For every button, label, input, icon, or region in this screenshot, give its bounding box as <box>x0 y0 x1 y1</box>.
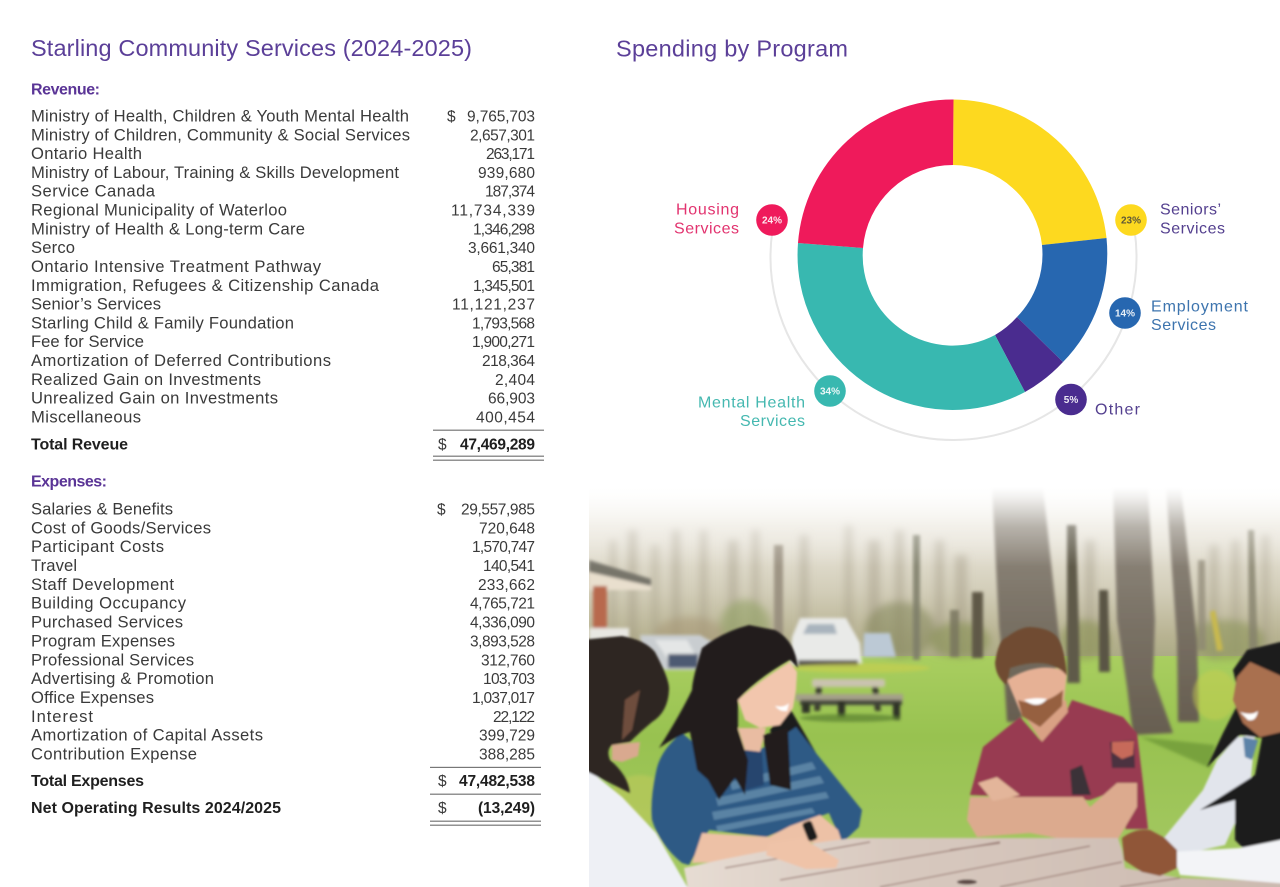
row: Starling Child and Family Foundation: 1,793,568 <box>472 315 535 332</box>
row: Immigration, Refugees and Citizenship Canada: 1,345,501 <box>473 278 535 295</box>
segment: other 5% <box>995 317 1063 392</box>
man: face and beard <box>1006 666 1068 716</box>
row: Participant Costs <box>31 537 535 556</box>
row: total revenue: Total Reveue <box>31 436 128 454</box>
row: Interest: Interest <box>31 707 93 726</box>
leader arc <box>770 230 1136 440</box>
blue car <box>863 633 896 657</box>
row: Advertising and Promotion: 103,703 <box>483 671 535 688</box>
row: Ministry of Health, Children and Youth Mental Health: 9,765,703 <box>467 108 535 126</box>
row: Participant Costs: 1,570,747 <box>472 539 535 556</box>
row: Regional Municipality of Waterloo: 11,734,339 <box>451 203 535 220</box>
row: Miscellaneous <box>31 408 535 426</box>
row: Advertising and Promotion: Advertising & Promotion <box>31 669 214 688</box>
callout: employment 14% <box>1109 297 1141 329</box>
left person: face <box>612 742 640 762</box>
row: Ontario Intensive Treatment Pathway: Ontario Intensive Treatment Pathway <box>31 257 322 276</box>
center woman: hair behind on the right <box>768 710 816 752</box>
row: Serco <box>31 238 535 257</box>
callout: housing 24% <box>756 204 788 236</box>
left person: hair <box>580 636 669 793</box>
center woman: arm and hand <box>692 815 842 869</box>
row: Travel <box>31 556 535 575</box>
row: Building Occupancy: Building Occupancy <box>31 594 187 613</box>
center woman: neck <box>738 728 766 752</box>
row: Office Expenses: 1,037,017 <box>472 690 535 707</box>
row: Purchased Services <box>31 613 535 632</box>
row: Building Occupancy <box>31 594 535 613</box>
row: Ministry of Health, Children and Youth Mental Health: $ <box>447 108 456 126</box>
label: employment services <box>1151 298 1249 334</box>
row: Starling Child and Family Foundation: Starling Child & Family Foundation <box>31 313 294 332</box>
row: Amortization of Capital Assets: Amortization of Capital Assets <box>31 726 263 745</box>
chart: spending donut <box>674 99 1249 440</box>
heading: revenue: Revenue: <box>31 82 100 98</box>
row: Office Expenses <box>31 688 535 707</box>
row: Realized Gain on Investments <box>31 370 535 389</box>
row: Service Canada: 187,374 <box>485 184 535 201</box>
right woman: forearm sleeve <box>1172 838 1280 884</box>
row: net operating results: Net Operating Results 2024/2025 <box>31 800 281 817</box>
callout: housing 24%: 24% <box>762 216 782 227</box>
label: housing services <box>674 202 739 238</box>
center woman: sweater <box>652 727 862 865</box>
row: Ministry of Labour: Ministry of Labour, Training & Skills Development <box>31 163 399 182</box>
right woman: hair <box>1200 642 1280 848</box>
row: Program Expenses: 3,893,528 <box>470 633 535 650</box>
row: Salaries and Benefits <box>31 500 535 518</box>
row: total expenses: $ <box>438 773 447 790</box>
callout: mental health 34% <box>814 375 846 407</box>
row: Salaries and Benefits: 29,557,985 <box>461 502 535 518</box>
row: Staff Development: 233,662 <box>478 577 535 594</box>
right woman: face <box>1233 662 1280 737</box>
row: Starling Child and Family Foundation <box>31 313 535 332</box>
label: housing services: Housing <box>676 202 739 218</box>
row: Service Canada: Service Canada <box>31 182 156 201</box>
label: mental health services: Services <box>740 413 805 430</box>
row: Contribution Expense: 388,285 <box>479 746 535 764</box>
label: housing services: Services <box>674 220 739 238</box>
row: Purchased Services: 4,336,090 <box>470 615 535 632</box>
row: Travel: Travel <box>31 556 77 575</box>
title: financial statement: Starling Community Services (2024-2025) <box>31 35 472 61</box>
label: mental health services <box>698 394 805 430</box>
white truck <box>790 618 862 665</box>
row: Fee for Service: 1,900,271 <box>472 334 535 351</box>
row: net operating results: $ <box>438 800 447 817</box>
row: total expenses <box>31 773 535 790</box>
row: total expenses: 47,482,538 <box>459 773 535 790</box>
row: Ontario Health: 263,171 <box>486 146 535 163</box>
thin background trunks <box>774 545 783 635</box>
center woman: face <box>738 662 797 728</box>
man: neck <box>1022 700 1068 742</box>
center woman: collar <box>745 750 764 790</box>
row: Salaries and Benefits: $ <box>437 502 446 518</box>
label: employment services: Employment <box>1151 298 1249 316</box>
row: Professional Services: 312,760 <box>481 652 535 669</box>
row: Interest <box>31 707 535 726</box>
center woman: hair <box>659 625 798 800</box>
row: Immigration, Refugees and Citizenship Canada <box>31 276 535 295</box>
picnic table background <box>812 679 885 687</box>
photo: four people talking at a picnic table outdoors <box>580 487 1280 887</box>
row: total expenses: Total Expenses <box>31 773 144 790</box>
row: Ministry of Children, Community and Social Services: 2,657,301 <box>470 127 535 144</box>
row: total revenue: $ <box>438 436 447 454</box>
row: Staff Development <box>31 575 535 594</box>
row: Participant Costs: Participant Costs <box>31 537 164 556</box>
building <box>589 560 651 586</box>
man: sleeve patch <box>1110 740 1135 768</box>
row: Travel: 140,541 <box>483 558 535 575</box>
row: Regional Municipality of Waterloo: Regional Municipality of Waterloo <box>31 201 287 220</box>
row: Service Canada <box>31 182 535 201</box>
row: Program Expenses: Program Expenses <box>31 631 175 650</box>
row: Cost of Goods/Services <box>31 518 535 537</box>
right woman: clasped hands <box>1122 830 1177 876</box>
left person: white shirt <box>589 770 689 887</box>
row: Fee for Service <box>31 332 535 351</box>
row: Advertising and Promotion <box>31 669 535 688</box>
label: seniors' services <box>1160 202 1225 238</box>
heading: expenses: Expenses: <box>31 474 107 490</box>
row: Contribution Expense: Contribution Expense <box>31 744 197 764</box>
label: mental health services: Mental Health <box>698 394 805 412</box>
row: Staff Development: Staff Development <box>31 575 174 594</box>
row: Ministry of Health and Long-term Care <box>31 219 535 238</box>
row: Miscellaneous: 400,454 <box>476 410 535 426</box>
row: Fee for Service: Fee for Service <box>31 332 144 351</box>
callout: other 5% <box>1055 384 1087 415</box>
row: Serco: Serco <box>31 238 75 257</box>
row: Miscellaneous: Miscellaneous <box>31 408 141 426</box>
row: Amortization of Capital Assets: 399,729 <box>479 728 535 745</box>
row: Cost of Goods/Services: 720,648 <box>479 520 535 537</box>
row: Ministry of Children, Community and Social Services: Ministry of Children, Community & Social Services <box>31 125 410 144</box>
row: Salaries and Benefits: Salaries & Benefits <box>31 500 173 518</box>
row: Ministry of Health, Children and Youth Mental Health: Ministry of Health, Children & Youth Mental Health <box>31 106 409 126</box>
top white fade <box>589 487 1280 567</box>
right woman: blue top <box>1243 737 1258 760</box>
man: hair <box>995 627 1067 685</box>
row: Ontario Intensive Treatment Pathway: 65,381 <box>492 259 535 276</box>
segment: seniors' services 23% <box>953 100 1106 245</box>
row: Ministry of Health and Long-term Care: 1,346,298 <box>473 221 535 238</box>
callout: seniors 23% <box>1115 204 1147 236</box>
man: shirt <box>970 700 1148 829</box>
row: Purchased Services: Purchased Services <box>31 613 183 632</box>
row: Ministry of Health and Long-term Care: Ministry of Health & Long-term Care <box>31 219 305 238</box>
row: Office Expenses: Office Expenses <box>31 688 154 707</box>
row: Unrealized Gain on Investments <box>31 389 535 408</box>
row: Senior's Services: Senior’s Services <box>31 295 161 314</box>
callout: other 5%: 5% <box>1064 395 1078 406</box>
row: Unrealized Gain on Investments: Unrealized Gain on Investments <box>31 389 278 408</box>
row: Senior's Services <box>31 295 535 314</box>
row: Ministry of Labour: 939,680 <box>478 165 535 182</box>
label: seniors' services: Services <box>1160 220 1225 238</box>
row: Building Occupancy: 4,765,721 <box>470 596 535 613</box>
row: net operating results: (13,249) <box>478 800 535 817</box>
label: other: Other <box>1095 402 1141 418</box>
row: Realized Gain on Investments: 2,404 <box>495 372 535 389</box>
panel: expenses table <box>31 474 541 826</box>
row: Ontario Health: Ontario Health <box>31 144 142 163</box>
row: total revenue: 47,469,289 <box>460 436 535 454</box>
left car <box>640 635 714 670</box>
row: Program Expenses <box>31 631 535 650</box>
row: Professional Services <box>31 650 535 669</box>
label: seniors' services: Seniors’ <box>1160 202 1221 218</box>
right woman: white shirt upper arm <box>1163 735 1255 855</box>
row: net operating results <box>31 800 535 817</box>
row: Amortization of Deferred Contributions: 218,364 <box>482 353 535 370</box>
row: Senior's Services: 11,121,237 <box>452 297 535 314</box>
picnic table top <box>684 838 1280 887</box>
heading: spending by program: Spending by Program <box>616 36 848 62</box>
row: Professional Services: Professional Services <box>31 650 194 669</box>
row: Ontario Health <box>31 144 535 163</box>
label: employment services: Services <box>1151 317 1216 334</box>
row: Immigration, Refugees and Citizenship Canada: Immigration, Refugees & Citizenship Canada <box>31 276 380 295</box>
callout: seniors 23%: 23% <box>1121 216 1141 227</box>
segment: housing services 24% <box>798 99 954 248</box>
row: Cost of Goods/Services: Cost of Goods/Services <box>31 518 211 537</box>
row: Ontario Intensive Treatment Pathway <box>31 257 535 276</box>
segment: employment services 14% <box>1017 238 1107 362</box>
man: crossed arms <box>967 783 1137 841</box>
row: Serco: 3,661,340 <box>468 240 535 257</box>
center woman: front hand on table <box>766 838 839 869</box>
row: Contribution Expense <box>31 744 535 764</box>
callout: employment 14%: 14% <box>1115 309 1135 320</box>
row: Interest: 22,122 <box>493 709 535 726</box>
row: Amortization of Capital Assets <box>31 726 535 745</box>
row: Realized Gain on Investments: Realized Gain on Investments <box>31 370 261 389</box>
shadows and flowers in grass <box>1140 737 1215 768</box>
callout: mental health 34%: 34% <box>820 387 840 398</box>
row: Regional Municipality of Waterloo <box>31 201 535 220</box>
row: Unrealized Gain on Investments: 66,903 <box>488 391 535 408</box>
large trunks <box>992 487 1062 722</box>
panel: revenue table <box>31 82 544 461</box>
segment: mental health services 34% <box>798 243 1025 410</box>
row: total revenue <box>31 436 535 454</box>
row: Amortization of Deferred Contributions <box>31 351 535 370</box>
row: Amortization of Deferred Contributions: Amortization of Deferred Contributions <box>31 351 331 370</box>
